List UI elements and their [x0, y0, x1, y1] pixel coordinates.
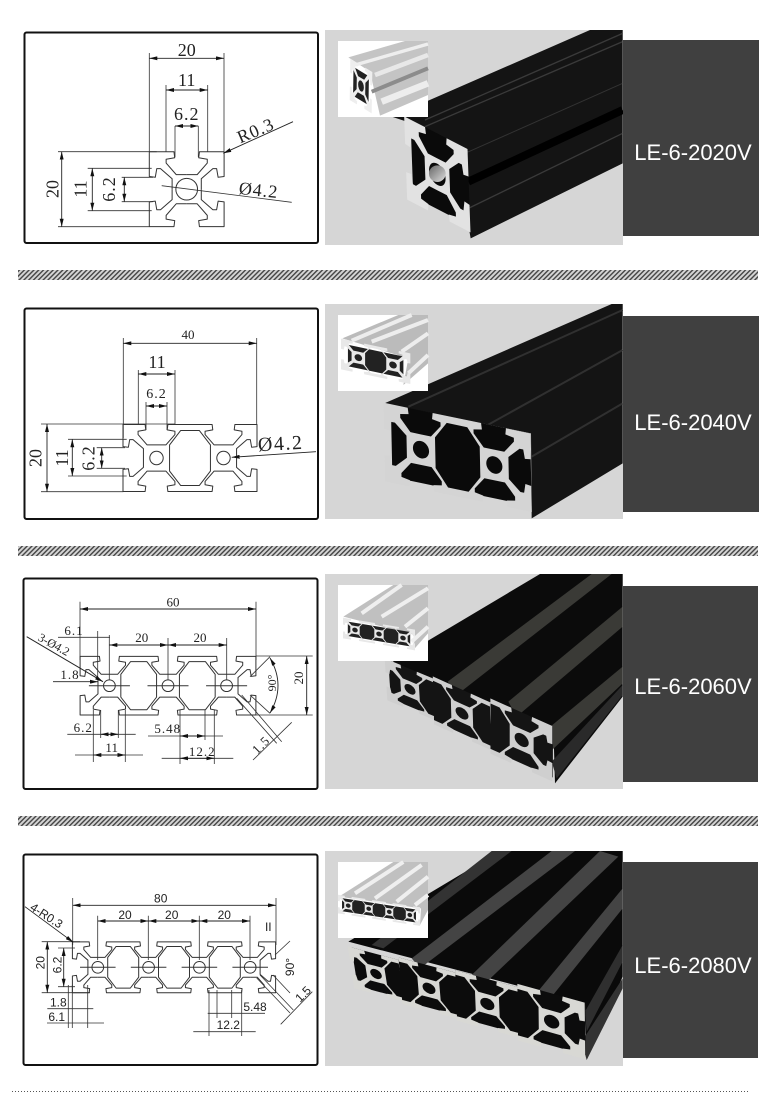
dimensions: 2080: II: [265, 920, 272, 934]
dimensions: 2060: 1.5: [249, 733, 273, 757]
dimensions: 2080: 20: [218, 908, 231, 922]
dimensions: 2040: 40: [182, 327, 194, 342]
dimensions: 2040: 11: [148, 352, 166, 372]
dimensions: 2040: [26, 327, 316, 492]
label box: LE-6-2080V: LE-6-2080V: [634, 953, 752, 978]
label box: LE-6-2060V: [623, 586, 758, 782]
dimensions: 2060: 3-Ø4.2: [36, 630, 72, 659]
photo: black 2020 extrusion: [392, 30, 623, 238]
panel: 2080 product photo: [318, 851, 623, 1066]
dimensions: 2020: 6.2: [99, 176, 119, 202]
panel: 2020 product photo: [325, 30, 623, 245]
dimensions: 2060: 11: [105, 740, 118, 755]
dimensions: 2020: Ø4.2: [238, 178, 279, 202]
dimensions: 2080: [25, 891, 314, 1036]
label box: LE-6-2060V: LE-6-2060V: [634, 674, 752, 699]
dimensions: 2080: 80: [154, 891, 168, 905]
dimensions: 2080: 1.8: [50, 996, 67, 1010]
thumbnail: silver 2060 extrusion: [338, 585, 428, 661]
dimensions: 2080: 4-R0.3: [28, 900, 66, 931]
dimensions: 2080: 20: [33, 956, 47, 969]
dimensions: 2040: 6.2: [146, 387, 167, 402]
photo: black 2080 extrusion: [318, 851, 623, 1060]
section 2: LE-6-2040V: [24, 304, 759, 519]
dimensions: 2060: 20: [194, 630, 206, 645]
panel: 2080 technical drawing frame: [24, 854, 318, 1065]
dimensions: 2040: 11: [52, 449, 72, 467]
dimensions: 2040: Ø4.2: [257, 432, 304, 456]
divider: hatched band 3: [18, 816, 758, 826]
panel: 2060 technical drawing frame: [24, 578, 318, 789]
divider: dotted line at page bottom: [12, 1090, 748, 1092]
drawing: 2040 cross section: [123, 424, 257, 492]
dimensions: 2060: 20: [291, 672, 306, 684]
dimensions: 2020: 20: [42, 180, 62, 198]
photo: black 2060 extrusion: [368, 574, 623, 783]
dimensions: 2020: 11: [178, 70, 195, 90]
label box: LE-6-2020V: [623, 40, 759, 236]
dimensions: 2080: 90°: [283, 958, 297, 976]
thumbnail: silver 2020 extrusion: [338, 41, 428, 117]
section 3: LE-6-2060V: [24, 574, 758, 789]
drawing: 2060 cross section: [80, 656, 256, 715]
divider: hatched band 2: [18, 546, 758, 556]
drawing: 2020 cross section: [149, 152, 224, 227]
label box: LE-6-2040V: [623, 316, 759, 512]
dimensions: 2060: 1.8: [60, 667, 80, 682]
dimensions: 2080: 12.2: [217, 1018, 240, 1032]
dimensions: 2080: 6.1: [48, 1010, 65, 1024]
dimensions: 2040: 6.2: [78, 445, 98, 471]
dimensions: 2020: [42, 40, 293, 227]
dimensions: 2060: 90°: [265, 674, 279, 691]
label box: LE-6-2080V: [623, 862, 758, 1058]
dimensions: 2080: 20: [118, 908, 132, 922]
dimensions: 2040: 20: [26, 449, 46, 467]
label box: LE-6-2040V: LE-6-2040V: [634, 410, 752, 435]
thumbnail: silver 2080 extrusion: [338, 862, 428, 938]
dimensions: 2060: 5.48: [154, 721, 181, 736]
dimensions: 2060: 6.1: [64, 623, 84, 638]
dimensions: 2080: 20: [165, 908, 179, 922]
dimensions: 2060: 20: [135, 630, 148, 645]
dimensions: 2080: 5.48: [243, 1000, 267, 1014]
dimensions: 2080: 1.5: [292, 983, 314, 1005]
thumbnail: silver 2040 extrusion: [338, 315, 428, 391]
panel: 2020 technical drawing frame: [24, 32, 318, 243]
dimensions: 2020: 20: [178, 40, 196, 60]
dimensions: 2020: 11: [71, 180, 91, 198]
panel: 2060 product photo: [325, 574, 623, 789]
section 4: LE-6-2080V: [24, 851, 758, 1066]
label box: LE-6-2020V: LE-6-2020V: [634, 140, 752, 165]
photo: black 2040 extrusion: [383, 304, 623, 518]
divider: hatched band 1: [18, 270, 758, 280]
dimensions: 2080: 6.2: [51, 956, 65, 973]
dimensions: 2020: R0.3: [234, 114, 277, 147]
dimensions: 2060: 6.2: [74, 720, 93, 735]
panel: 2040 technical drawing frame: [24, 308, 318, 519]
panel: 2040 product photo: [325, 304, 623, 519]
drawing: 2080 cross section: [72, 942, 276, 993]
dimensions: 2020: 6.2: [174, 104, 199, 124]
section 1: LE-6-2020V: [24, 30, 759, 245]
dimensions: 2060: [27, 595, 313, 764]
dimensions: 2060: 60: [166, 595, 180, 610]
dimensions: 2060: 12.2: [189, 744, 216, 759]
